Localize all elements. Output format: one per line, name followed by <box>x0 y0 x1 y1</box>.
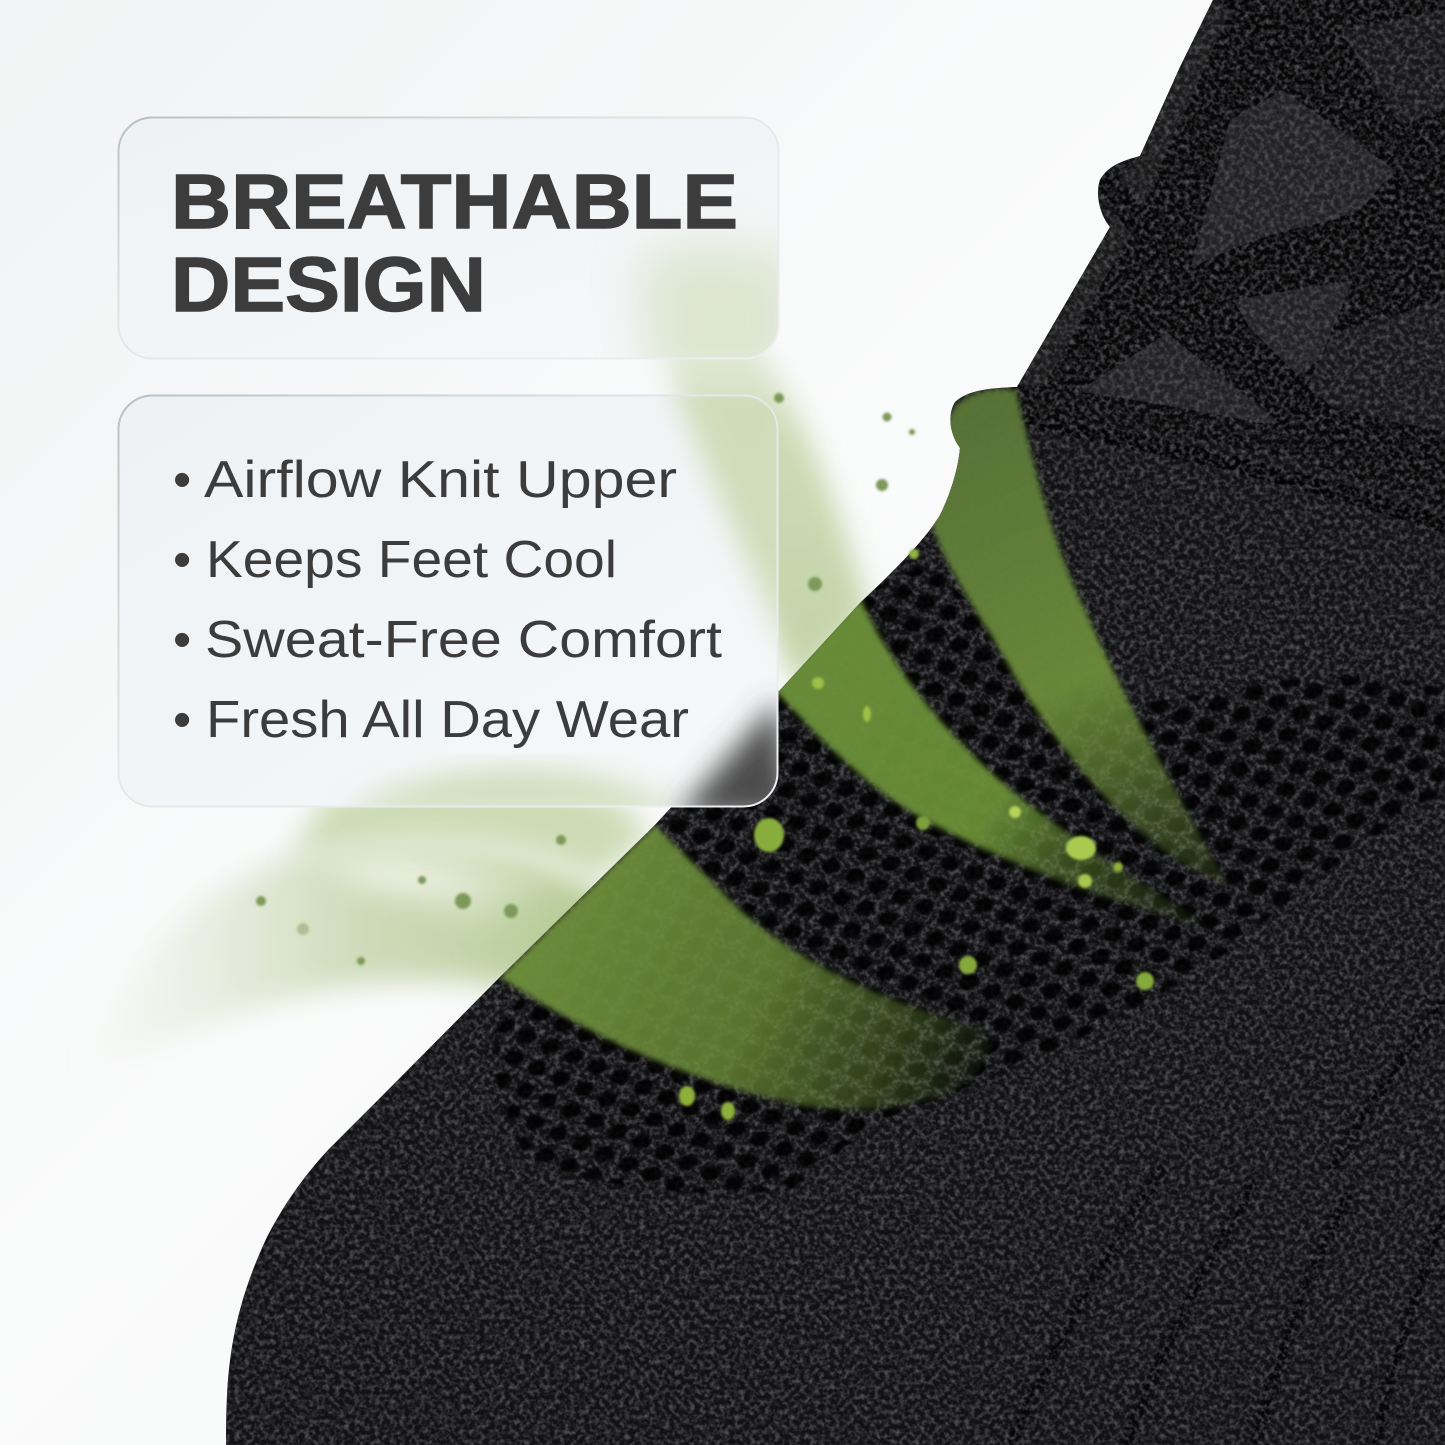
green band: collar <box>932 389 1228 885</box>
feature list: • <box>173 531 191 589</box>
tongue panels <box>1080 10 1445 433</box>
green band: middle <box>775 598 1205 925</box>
mesh zone <box>494 560 1445 1194</box>
feature list: Airflow Knit Upper <box>204 451 677 509</box>
feature list: • <box>173 691 191 749</box>
feature list: Sweat-Free Comfort <box>205 611 723 669</box>
heading <box>171 159 738 328</box>
swoosh: lower-left wing <box>88 848 650 1070</box>
swoosh: upper wing <box>290 772 650 880</box>
heading: DESIGN <box>171 242 486 328</box>
feature list <box>173 451 723 749</box>
feature list: Keeps Feet Cool <box>206 531 617 589</box>
swoosh: upper pale airflow <box>640 270 870 690</box>
collar dark interior <box>1017 0 1445 510</box>
feature list: • <box>173 451 191 509</box>
feature list: • <box>173 611 191 669</box>
collar binding <box>1030 0 1222 385</box>
laces <box>1017 0 1445 525</box>
swoosh: pale gap highlight <box>320 861 570 925</box>
heading: BREATHABLE <box>171 159 738 245</box>
panel: title <box>118 116 780 360</box>
green band: lower <box>500 825 989 1109</box>
feature list: Fresh All Day Wear <box>206 691 689 749</box>
seams <box>1010 1000 1445 1445</box>
panel: features <box>118 375 800 818</box>
green particles <box>256 393 1154 1120</box>
